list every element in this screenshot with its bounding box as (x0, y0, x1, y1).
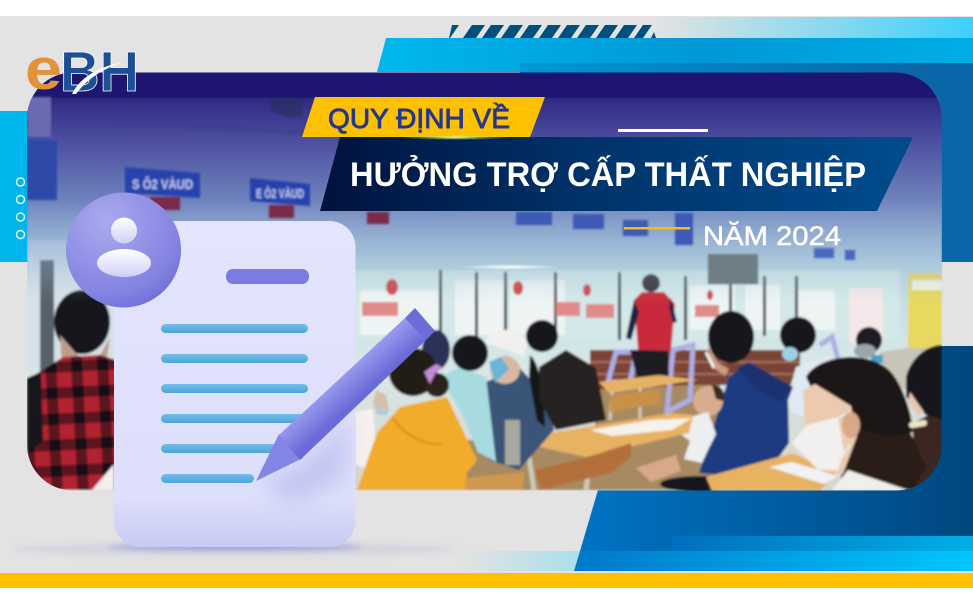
pen shadow (262, 419, 352, 504)
paper near document (92, 464, 114, 490)
ceiling and wall signs: E Ô2 VÀUD (256, 186, 304, 201)
photo colour overlay (27, 72, 942, 302)
man in navy hoodie with baby (636, 311, 793, 492)
year label: NĂM 2024 (703, 221, 841, 251)
right blue panel (520, 63, 973, 262)
third table with papers (706, 453, 838, 491)
second table (599, 375, 698, 420)
chairs (608, 337, 838, 412)
ceiling and wall signs (27, 97, 855, 284)
yellow heading ribbon: QUY ĐỊNH VỀ (328, 103, 510, 134)
ceiling and wall signs: S Ô2 VÀUD (132, 175, 193, 192)
top light gradient band (655, 17, 973, 38)
document icon (114, 221, 356, 547)
navy title ribbon: HƯỞNG TRỢ CẤP THẤT NGHIỆP (350, 156, 866, 194)
yellow hoodie woman (357, 348, 477, 490)
white accent line (618, 129, 708, 132)
document sheet (114, 221, 356, 547)
user badge icon (66, 192, 181, 308)
pen icon (256, 308, 435, 481)
light flare (400, 135, 510, 140)
photo wall (27, 72, 942, 492)
decorative dots (16, 178, 24, 238)
yellow accent line (624, 227, 690, 230)
logo letter e: e (25, 37, 62, 102)
navy back person (422, 330, 450, 370)
large front table (508, 413, 693, 490)
logo letters BH: BH (60, 40, 139, 104)
logo eBH (25, 37, 139, 104)
floor and wood behind people (465, 385, 720, 490)
yellow heading ribbon (302, 97, 545, 137)
pen cap (405, 308, 435, 341)
navy title ribbon (320, 135, 913, 211)
service counter and glass (27, 240, 942, 392)
logo swoosh (72, 62, 122, 94)
bottom yellow bar (0, 573, 973, 588)
woman with white mask (792, 345, 942, 490)
back row people right (780, 317, 883, 417)
paper on left (355, 409, 376, 468)
woman in jeans jacket with cap (484, 330, 554, 470)
document text lines (161, 324, 308, 483)
man in red plaid shirt (27, 288, 114, 490)
pen body (279, 318, 425, 460)
bench (462, 472, 525, 490)
ground shadow (13, 541, 457, 557)
left cyan panel (0, 111, 40, 262)
photo: people waiting at the employment office (27, 72, 942, 492)
standing man in red vest (626, 274, 677, 378)
lens glare (460, 264, 560, 270)
hazard stripes (449, 25, 656, 38)
pen tip (256, 434, 303, 481)
man in black hoodie (526, 320, 606, 430)
top blue band (377, 38, 973, 72)
light teal hoodie woman (440, 335, 496, 462)
bottom right blue panels (460, 346, 973, 571)
document title bar (226, 269, 309, 284)
